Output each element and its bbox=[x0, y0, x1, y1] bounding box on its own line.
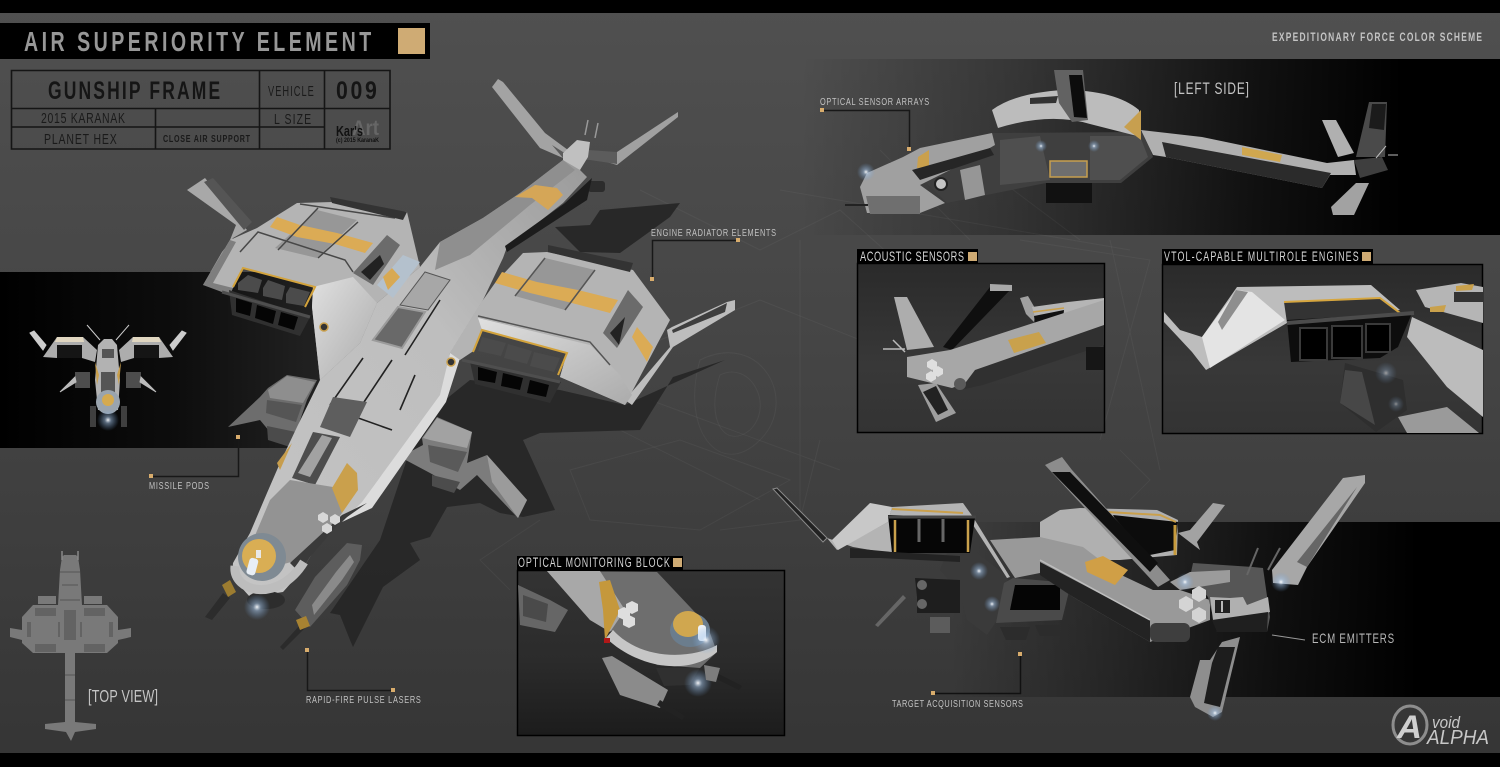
rear: engine block bbox=[1190, 563, 1270, 632]
callout: optical sensor arrays bbox=[820, 96, 929, 151]
optical view: nose close-up bbox=[518, 571, 742, 720]
table: vehicle: VEHICLE bbox=[268, 83, 314, 100]
fuselage: nose shoulder bbox=[251, 480, 342, 565]
fuselage: sensor hexes bbox=[318, 512, 340, 534]
table: year and author: 2015 KARANAK bbox=[41, 109, 125, 126]
left wing: orange stripe bbox=[270, 217, 373, 253]
top view ship bbox=[10, 551, 131, 741]
right wing: vent bbox=[603, 290, 643, 348]
main ship: isometric view bbox=[187, 79, 735, 650]
heading: colour scheme: EXPEDITIONARY FORCE COLOR SCHEME bbox=[1272, 32, 1482, 44]
right engine lids bbox=[478, 337, 560, 372]
table: frame name: GUNSHIP FRAME bbox=[48, 76, 220, 105]
right winglet bbox=[625, 300, 735, 405]
left wing: rear radiator bbox=[330, 197, 407, 220]
panel heading: VTOL engines: VTOL-CAPABLE MULTIROLE ENGINES bbox=[1164, 250, 1359, 265]
callout: engine radiator elements bbox=[650, 227, 776, 281]
callout: ECM emitters: ECM EMITTERS bbox=[1312, 632, 1394, 646]
left wing: side edge bbox=[203, 240, 236, 295]
table: role: CLOSE AIR SUPPORT bbox=[163, 133, 250, 144]
front view ship bbox=[30, 325, 186, 431]
right wing: lower face bbox=[478, 318, 632, 405]
left winglet bbox=[187, 178, 252, 285]
left engine wing bbox=[203, 197, 420, 380]
callout: engine radiator elements: ENGINE RADIATOR ELEMENTS bbox=[651, 227, 776, 238]
VTOL view: engine close-up bbox=[1164, 283, 1483, 433]
left wing: yellow intake frame bbox=[233, 268, 315, 307]
ship cast shadow bbox=[330, 203, 725, 647]
panel: VTOL engines bbox=[1162, 249, 1483, 434]
right wing: centre roof panel bbox=[515, 258, 595, 310]
rear: hex sensors bbox=[1179, 586, 1206, 623]
callout: ECM emitters bbox=[1272, 632, 1394, 646]
nose with sensor disc bbox=[235, 533, 304, 609]
right engine bar bbox=[462, 360, 560, 382]
side: lower hull shading bbox=[1000, 136, 1148, 185]
side: tail fins bbox=[1356, 102, 1387, 157]
title text: AIR SUPERIORITY ELEMENT bbox=[24, 27, 371, 58]
tail fins bbox=[492, 79, 678, 192]
acoustic view: ship tail bbox=[883, 284, 1104, 422]
rear: central mechanism bbox=[940, 553, 1008, 635]
rear three-quarter ship bbox=[773, 457, 1365, 721]
right wing: orange stripe bbox=[495, 272, 618, 313]
fuselage: cockpit recess bbox=[292, 432, 340, 485]
left engine bar bbox=[222, 292, 310, 317]
callout: optical sensor arrays: OPTICAL SENSOR ARRAYS bbox=[820, 96, 929, 107]
logo: void alpha: A bbox=[1396, 709, 1422, 745]
left engine block bbox=[229, 290, 310, 336]
fuselage: side hull edge bbox=[342, 300, 483, 522]
top black bar bbox=[0, 0, 1500, 13]
right wing: panel lines bbox=[478, 258, 610, 365]
fuselage: boom orange band bbox=[515, 185, 563, 210]
rear: blue lights bbox=[1176, 573, 1194, 591]
callout: target acquisition sensors bbox=[892, 652, 1023, 709]
rear: far wing with fin bbox=[1040, 503, 1225, 560]
rear: tail boom bbox=[990, 537, 1210, 642]
fuselage: boom upper plating bbox=[435, 160, 575, 270]
left wing: lower face bbox=[312, 277, 377, 380]
right missile pod bbox=[400, 417, 527, 518]
side: front hull bbox=[860, 133, 995, 213]
right wing: yellow intake frame bbox=[473, 330, 567, 375]
fuselage: orange cheek panels bbox=[332, 463, 358, 513]
colour swatch bbox=[398, 28, 425, 54]
callout: missile pods bbox=[149, 435, 240, 491]
left missile pod bbox=[228, 375, 317, 447]
heading: left side view: [LEFT SIDE] bbox=[1174, 80, 1249, 99]
right engine block bbox=[470, 362, 561, 403]
left side ship bbox=[845, 70, 1398, 215]
table: signature logo: Art bbox=[352, 117, 379, 140]
right engine wing bbox=[447, 245, 670, 405]
panel heading: acoustic sensors: ACOUSTIC SENSORS bbox=[860, 250, 964, 265]
band: rear view backdrop bbox=[950, 522, 1500, 697]
nose glow bbox=[244, 594, 270, 620]
panel heading: optical monitoring block: OPTICAL MONITORING BLOCK bbox=[518, 556, 670, 571]
table: number: 009 bbox=[336, 76, 377, 104]
table: signature logo: Kar's bbox=[336, 123, 363, 140]
side: vertical tail plate bbox=[1054, 70, 1088, 122]
rear: belly engine bbox=[996, 578, 1071, 640]
table: signature logo bbox=[336, 117, 380, 144]
panel: optical monitoring block bbox=[517, 556, 784, 736]
left wing: panel lines bbox=[240, 204, 395, 272]
rear: tall fin bbox=[1045, 457, 1170, 587]
band: left side backdrop bbox=[800, 59, 1500, 235]
right engine cells bbox=[478, 367, 549, 397]
table: planet: PLANET HEX bbox=[44, 130, 117, 147]
logo: void alpha bbox=[1393, 706, 1489, 749]
side: engine window bbox=[1050, 161, 1087, 177]
callout: missile pods: MISSILE PODS bbox=[149, 480, 209, 491]
fuselage: dorsal slab bbox=[320, 397, 367, 437]
fuselage hull bbox=[232, 160, 592, 597]
band: front view backdrop bbox=[0, 272, 320, 448]
fuselage: boom underside bbox=[505, 178, 592, 252]
table: signature logo: (c) 2015 KaranaK bbox=[336, 138, 380, 144]
logo: void alpha: ALPHA bbox=[1426, 727, 1489, 749]
left wing: centre roof panel bbox=[275, 210, 357, 258]
right gun pod bbox=[280, 543, 362, 650]
callout: target acquisition sensors: TARGET ACQUISITION SENSORS bbox=[892, 698, 1023, 709]
callout: rapid-fire pulse lasers: RAPID-FIRE PULSE LASERS bbox=[306, 694, 421, 705]
left wing: vent bbox=[353, 235, 400, 285]
rear: near wing and engine bbox=[827, 503, 1010, 578]
rear: glows bbox=[970, 562, 988, 580]
left wing: window bbox=[377, 255, 420, 298]
side: engine dome bbox=[992, 90, 1141, 137]
spec table bbox=[12, 70, 390, 149]
rear: left thin fin bbox=[773, 488, 827, 542]
left engine lids bbox=[238, 275, 310, 306]
rear: big right fin bbox=[1272, 475, 1365, 585]
rear: nose guns bbox=[875, 578, 960, 633]
fuselage: roof plates bbox=[400, 272, 450, 310]
left engine cells bbox=[236, 298, 298, 330]
table: size: L SIZE bbox=[274, 110, 311, 127]
fuselage: panel lines bbox=[330, 300, 440, 430]
title banner bbox=[0, 23, 430, 59]
heading: top view: [TOP VIEW] bbox=[88, 687, 158, 707]
logo: void alpha: void bbox=[1432, 713, 1460, 732]
faint blueprint sketch bbox=[480, 150, 1160, 590]
bottom black bar bbox=[0, 753, 1500, 767]
panel: acoustic sensors bbox=[857, 249, 1104, 432]
callout: rapid-fire pulse lasers bbox=[305, 648, 421, 705]
side: tail boom bbox=[1141, 130, 1356, 188]
rear: exhaust cylinder bbox=[1150, 623, 1190, 642]
side: centre dark body bbox=[916, 132, 1153, 203]
rear: lower fin bbox=[1190, 637, 1240, 717]
right wing: rear radiator bbox=[548, 245, 633, 272]
fuselage: roof hatch bbox=[373, 307, 425, 348]
left gun bbox=[205, 580, 236, 620]
